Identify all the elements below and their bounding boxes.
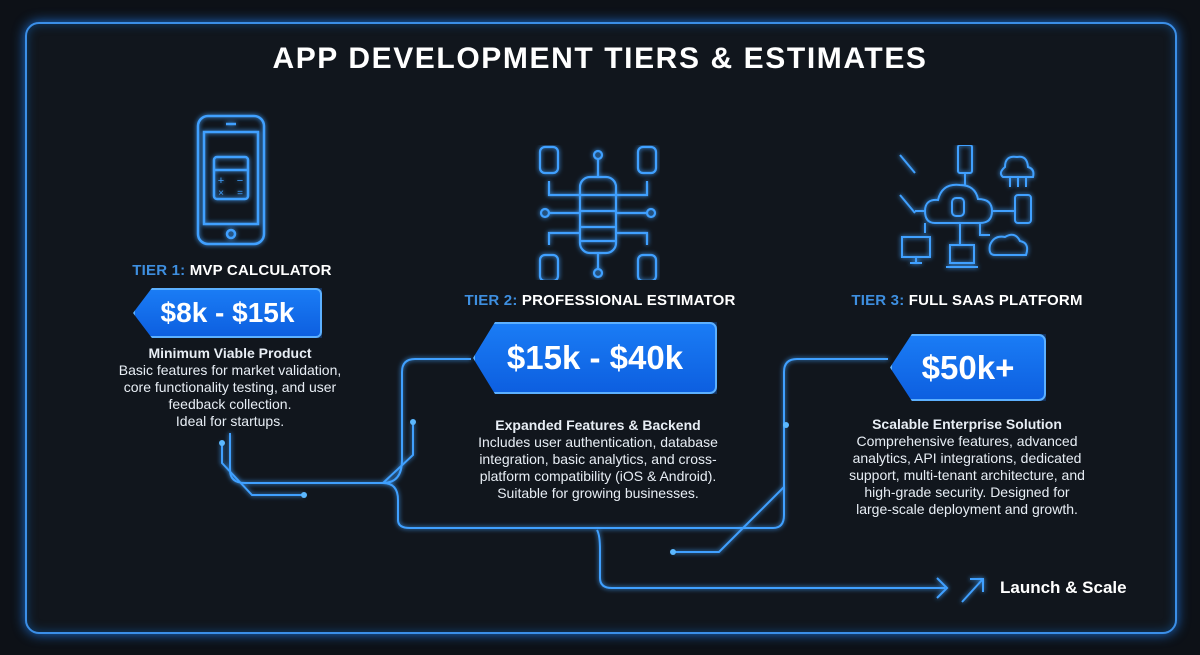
icon: cloud network — [896, 145, 1038, 272]
tier 3 description: analytics, API integrations, dedicated — [853, 450, 1081, 466]
tier 2 price tag — [473, 322, 717, 394]
tier 3 description: high-grade security. Designed for — [864, 484, 1070, 500]
tier 3 price tag — [890, 334, 1046, 401]
tier 3 description: Comprehensive features, advanced — [856, 433, 1078, 449]
tier 1 description: feedback collection. — [169, 396, 291, 412]
tier 1 description: Basic features for market validation, — [119, 362, 341, 378]
icon: phone calculator: = — [237, 188, 243, 199]
tier 1 price tag: $8k - $15k — [161, 297, 294, 328]
title: APP DEVELOPMENT TIERS & ESTIMATES — [272, 42, 928, 75]
tier 2 description: platform compatibility (iOS & Android). — [480, 468, 716, 484]
tier 2 description — [478, 417, 718, 501]
icon: phone calculator — [192, 110, 270, 250]
tier 1 price tag — [133, 288, 322, 338]
tier 2 description: Includes user authentication, database — [478, 434, 718, 450]
tier 3 description: Scalable Enterprise Solution — [872, 416, 1062, 432]
icon: phone calculator: × — [218, 188, 224, 199]
tier 2 description: integration, basic analytics, and cross- — [479, 451, 717, 467]
icon: database network — [535, 145, 660, 280]
tier 1 label: TIER 1: MVP CALCULATOR — [132, 262, 332, 279]
icon: phone calculator: + — [218, 175, 224, 187]
tier 2 description: Expanded Features & Backend — [495, 417, 701, 433]
tier 1 description — [119, 345, 341, 429]
tier 2 label: TIER 2: PROFESSIONAL ESTIMATOR — [464, 292, 736, 309]
tier 1 description: core functionality testing, and user — [124, 379, 336, 395]
tier 3 label: TIER 3: FULL SAAS PLATFORM — [851, 292, 1083, 309]
tier 2 description: Suitable for growing businesses. — [497, 485, 699, 501]
tier 1 description: Ideal for startups. — [176, 413, 284, 429]
launch & scale label: Launch & Scale — [1000, 578, 1127, 597]
tier 2 price tag: $15k - $40k — [507, 339, 683, 376]
tier 3 description: large-scale deployment and growth. — [856, 501, 1078, 517]
tier 3 description: support, multi-tenant architecture, and — [849, 467, 1085, 483]
tier 3 price tag: $50k+ — [922, 348, 1014, 386]
tier 3 description — [849, 416, 1085, 517]
tier 1 description: Minimum Viable Product — [148, 345, 312, 361]
icon: phone calculator: − — [237, 175, 243, 187]
